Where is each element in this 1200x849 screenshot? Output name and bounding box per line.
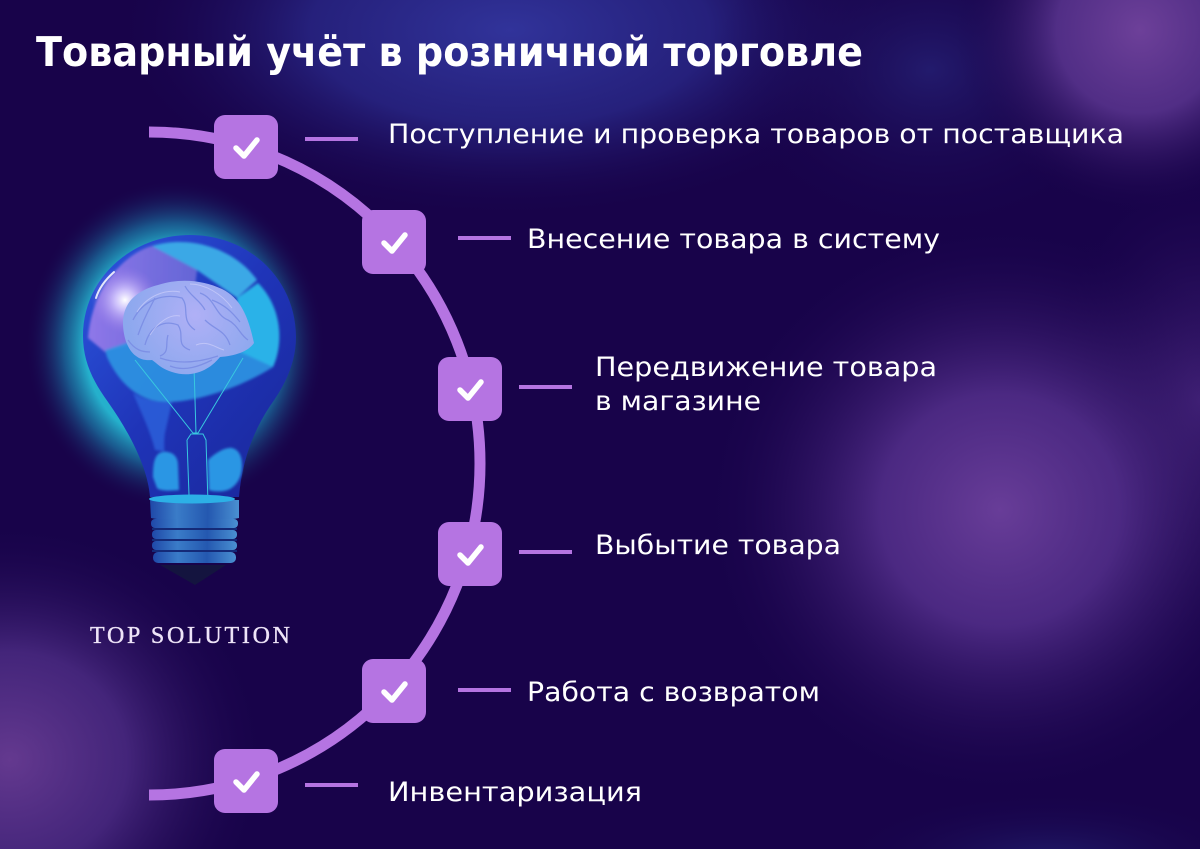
- connector: [458, 688, 511, 692]
- icon: filament: [135, 333, 243, 503]
- connector: [519, 385, 572, 389]
- connector: [458, 236, 511, 240]
- brand label: TOP SOLUTION: [90, 623, 290, 649]
- checkbox icon: [214, 749, 278, 813]
- checkbox icon: [214, 115, 278, 179]
- title: Товарный учёт в розничной торговле: [36, 28, 863, 76]
- step 3: [438, 352, 937, 421]
- connector: [305, 137, 358, 141]
- step 4: [438, 522, 841, 586]
- connector: [519, 550, 572, 554]
- checkbox icon: [362, 659, 426, 723]
- label: [595, 352, 937, 417]
- step 6: [214, 749, 642, 813]
- icon: flare: [91, 266, 159, 334]
- label: Работа с возвратом: [527, 677, 820, 708]
- icon: brain: [123, 281, 254, 374]
- checkbox icon: [438, 357, 502, 421]
- checkbox icon: [362, 210, 426, 274]
- timeline arc: [149, 132, 480, 795]
- icon: bulb glass: [83, 235, 296, 497]
- label: Внесение товара в систему: [527, 224, 940, 255]
- icon: bulb glow: [25, 180, 325, 510]
- label: Инвентаризация: [388, 777, 642, 808]
- icon: bulb inner reflections: [88, 242, 279, 491]
- label: Поступление и проверка товаров от поставщика: [388, 119, 1124, 150]
- icon: bulb screw base: [149, 494, 239, 585]
- light bulb illustration: [25, 180, 325, 585]
- checkbox icon: [438, 522, 502, 586]
- step 2: [362, 210, 940, 274]
- label: в магазине: [595, 386, 761, 417]
- step 1: [214, 115, 1124, 179]
- connector: [305, 783, 358, 787]
- label: Выбытие товара: [595, 530, 841, 561]
- step 5: [362, 659, 820, 723]
- label: Передвижение товара: [595, 352, 937, 383]
